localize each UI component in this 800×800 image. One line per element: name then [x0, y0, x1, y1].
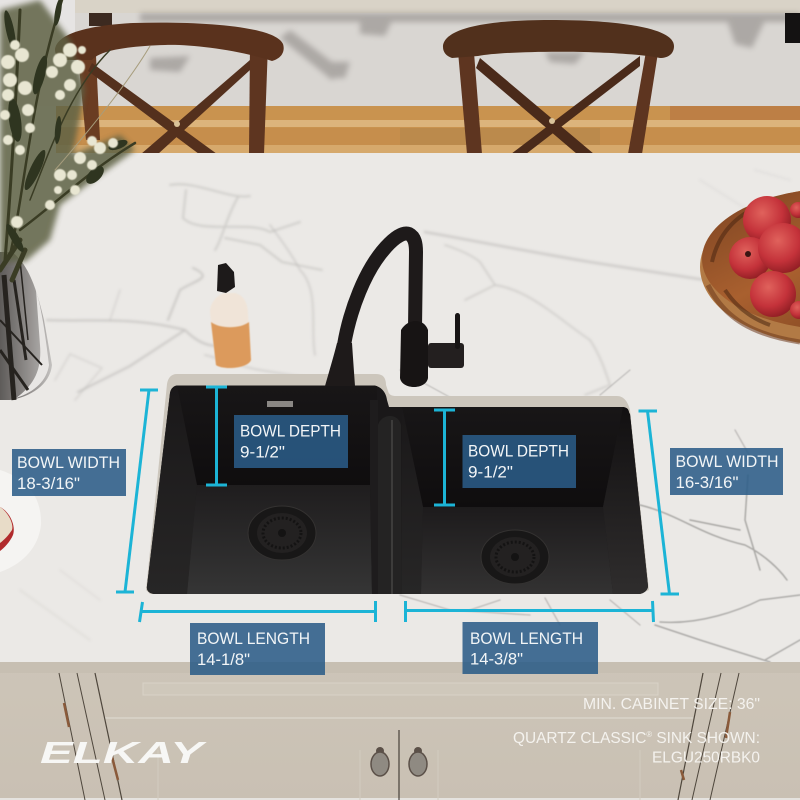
- text: sink shown: [513, 730, 760, 766]
- text: sink shown: QUARTZ CLASSIC: [513, 730, 651, 747]
- faucet: [325, 234, 464, 387]
- soap bottle: [210, 263, 251, 368]
- cabinet: [0, 662, 800, 800]
- plate with apple slice: [0, 470, 41, 572]
- label: left bowl width: BOWL WIDTH: [17, 454, 120, 472]
- text: sink shown: ELGU250RBK0: [652, 750, 760, 766]
- cabinet knob: right: [409, 747, 427, 776]
- glass vase: [0, 252, 52, 400]
- dimension: left bowl length: [140, 601, 376, 622]
- cabinet knob: left: [371, 747, 389, 776]
- sink: rim: [146, 374, 649, 594]
- drain: right bowl: [481, 530, 549, 584]
- label: right bowl length: 14-3/8": [470, 650, 523, 668]
- drain: left bowl: [248, 506, 316, 560]
- label: left bowl width: [12, 449, 126, 496]
- label: right bowl length: BOWL LENGTH: [470, 630, 583, 648]
- plant: leaves and white flowers: [0, 0, 150, 280]
- wooden bowl with apples: [700, 188, 800, 346]
- label: left bowl width: 18-3/16": [17, 475, 80, 493]
- dimension: right bowl length: [406, 601, 654, 622]
- label: right bowl width: 16-3/16": [676, 474, 739, 492]
- countertop: white marble: [0, 153, 800, 665]
- marble veins: [20, 170, 800, 662]
- label: left bowl length: 14-1/8": [197, 651, 250, 669]
- chair: right: [443, 20, 674, 154]
- logo: Elkay: ELKAY: [40, 735, 208, 770]
- dimension: right bowl width: [638, 411, 679, 594]
- label: right bowl width: BOWL WIDTH: [676, 453, 778, 471]
- dimension: left bowl depth: [206, 387, 227, 485]
- label: left bowl length: [190, 623, 325, 675]
- sink: basin interior: [147, 386, 648, 594]
- label: right bowl length: [462, 622, 598, 674]
- dimension: left bowl width: [116, 390, 158, 592]
- label: right bowl depth: 9-1/2": [468, 464, 513, 482]
- label: left bowl length: BOWL LENGTH: [197, 630, 310, 648]
- sink: center divider: [378, 416, 402, 594]
- text: minimum cabinet size: MIN. CABINET SIZE: 36": [583, 696, 760, 713]
- label: left bowl depth: 9-1/2": [240, 444, 285, 462]
- background: upper room: [0, 0, 800, 106]
- text: sink shown: SINK SHOWN:: [652, 730, 760, 747]
- label: right bowl width: [670, 448, 783, 495]
- label: left bowl depth: BOWL DEPTH: [240, 422, 341, 440]
- label: left bowl depth: [234, 415, 348, 468]
- label: right bowl depth: [462, 435, 576, 488]
- label: right bowl depth: BOWL DEPTH: [468, 442, 569, 460]
- chair: left: [55, 23, 284, 154]
- text: sink shown: ®: [646, 730, 652, 739]
- dimension: right bowl depth: [434, 410, 455, 505]
- floor: wood planks: [56, 106, 800, 154]
